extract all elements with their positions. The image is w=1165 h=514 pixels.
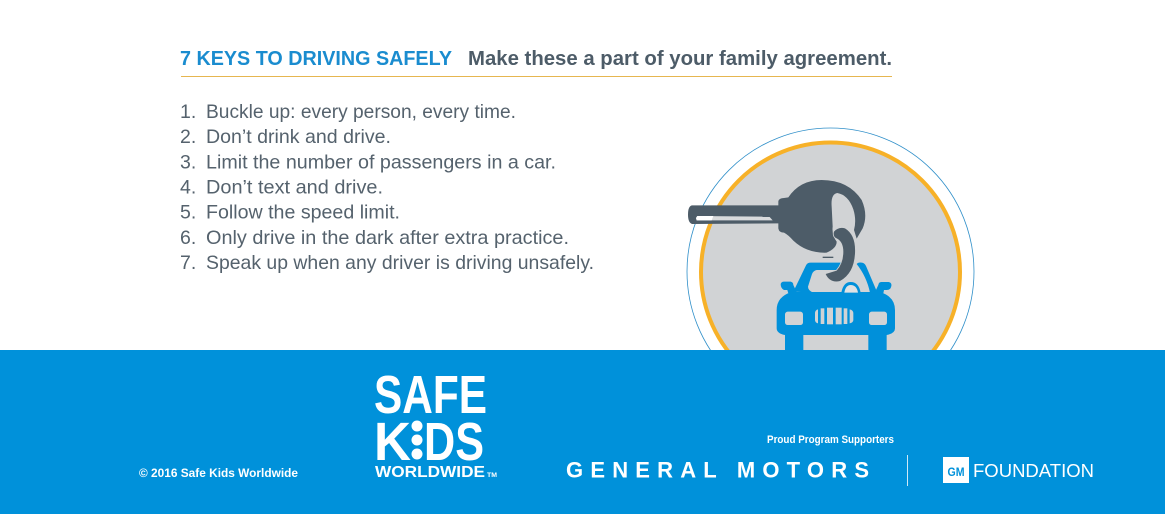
item 1: 1. (180, 101, 196, 123)
item 1: Buckle up: every person, every time. (206, 101, 516, 123)
item 2: Don’t drink and drive. (206, 126, 391, 148)
logo: GM Foundation: GM (948, 465, 964, 479)
supporters label: Proud Program Supporters (767, 434, 894, 446)
logo: Safe Kids Worldwide: WORLDWIDE (375, 464, 485, 481)
logo: Safe Kids Worldwide (374, 365, 497, 481)
logo: Safe Kids Worldwide: K (374, 412, 411, 472)
logo: GM Foundation (943, 457, 1094, 483)
item 5: 5. (180, 202, 196, 224)
item 5: Follow the speed limit. (206, 202, 400, 224)
logo: Safe Kids Worldwide: DS (424, 412, 484, 472)
heading (180, 48, 892, 70)
heading: 7 keys: 7 KEYS TO DRIVING SAFELY (180, 48, 453, 70)
numbered list (180, 101, 594, 274)
heading: family agreement: Make these a part of your family agreement. (468, 48, 892, 70)
logo: Safe Kids Worldwide: SAFE (374, 365, 487, 425)
item 4: 4. (180, 176, 196, 198)
logo: GM Foundation: FOUNDATION (973, 461, 1094, 481)
item 7: 7. (180, 252, 196, 274)
item 3: 3. (180, 152, 196, 174)
item 6: Only drive in the dark after extra practice. (206, 227, 569, 249)
icon: key (688, 180, 865, 258)
icon: key and car in circle (687, 128, 974, 415)
item 2: 2. (180, 126, 196, 148)
footer band (0, 350, 1165, 514)
logo: General Motors: GENERAL MOTORS (566, 458, 869, 482)
logo: Safe Kids Worldwide: TM (487, 473, 497, 479)
item 4: Don’t text and drive. (206, 176, 383, 198)
item 7: Speak up when any driver is driving unsafely. (206, 252, 594, 274)
item 3: Limit the number of passengers in a car. (206, 152, 556, 174)
icon: key chain link (826, 228, 855, 281)
copyright: © 2016 Safe Kids Worldwide (139, 466, 298, 480)
item 6: 6. (180, 227, 196, 249)
icon: car (777, 262, 895, 350)
